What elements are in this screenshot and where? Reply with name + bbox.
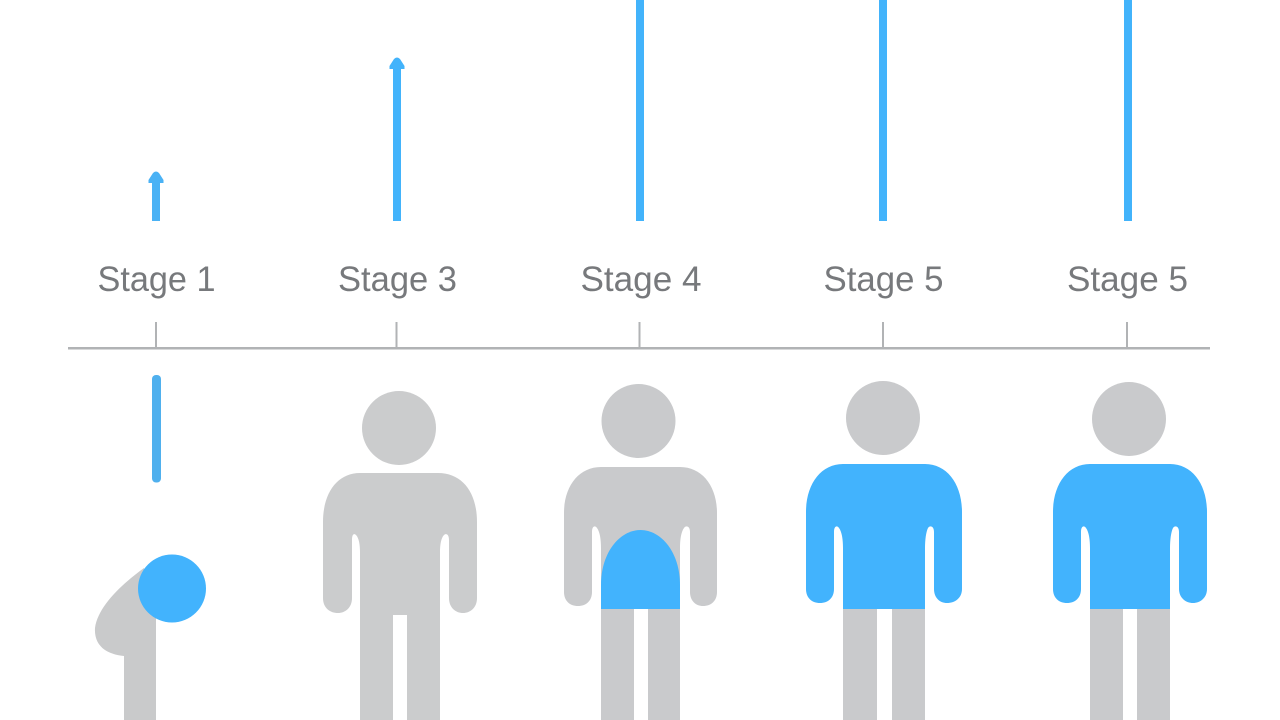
figure: stage 1 bent person (95, 375, 206, 720)
arrow: stage 3 (390, 58, 404, 221)
figure: stage 5 person (806, 381, 962, 720)
blue abdomen dome (601, 530, 680, 609)
figure: stage 3 person (323, 391, 477, 720)
bar: stage 5 (879, 0, 887, 221)
bar: stage 4 (636, 0, 644, 221)
detached blue bar (152, 375, 161, 482)
arrow: stage 1 (148, 172, 164, 221)
body (323, 473, 477, 720)
bar: second stage 5 (1124, 0, 1132, 221)
figure: second stage 5 person (1053, 382, 1207, 720)
bent body (95, 568, 156, 720)
head (602, 384, 676, 458)
legs (1090, 605, 1170, 720)
legs (843, 605, 925, 720)
body (564, 467, 717, 720)
blue torso (806, 464, 962, 609)
head (846, 381, 920, 455)
label: second Stage 5: Stage 5 (1067, 260, 1188, 299)
head (362, 391, 436, 465)
label: Stage 4: Stage 4 (580, 260, 702, 299)
blue torso (1053, 464, 1207, 609)
label: Stage 5: Stage 5 (824, 260, 944, 299)
axis with ticks (68, 322, 1210, 350)
label: Stage 1: Stage 1 (98, 260, 216, 299)
head (1092, 382, 1166, 456)
label: Stage 3: Stage 3 (338, 260, 457, 299)
blue head (138, 554, 206, 622)
figure: stage 4 person (564, 384, 717, 720)
